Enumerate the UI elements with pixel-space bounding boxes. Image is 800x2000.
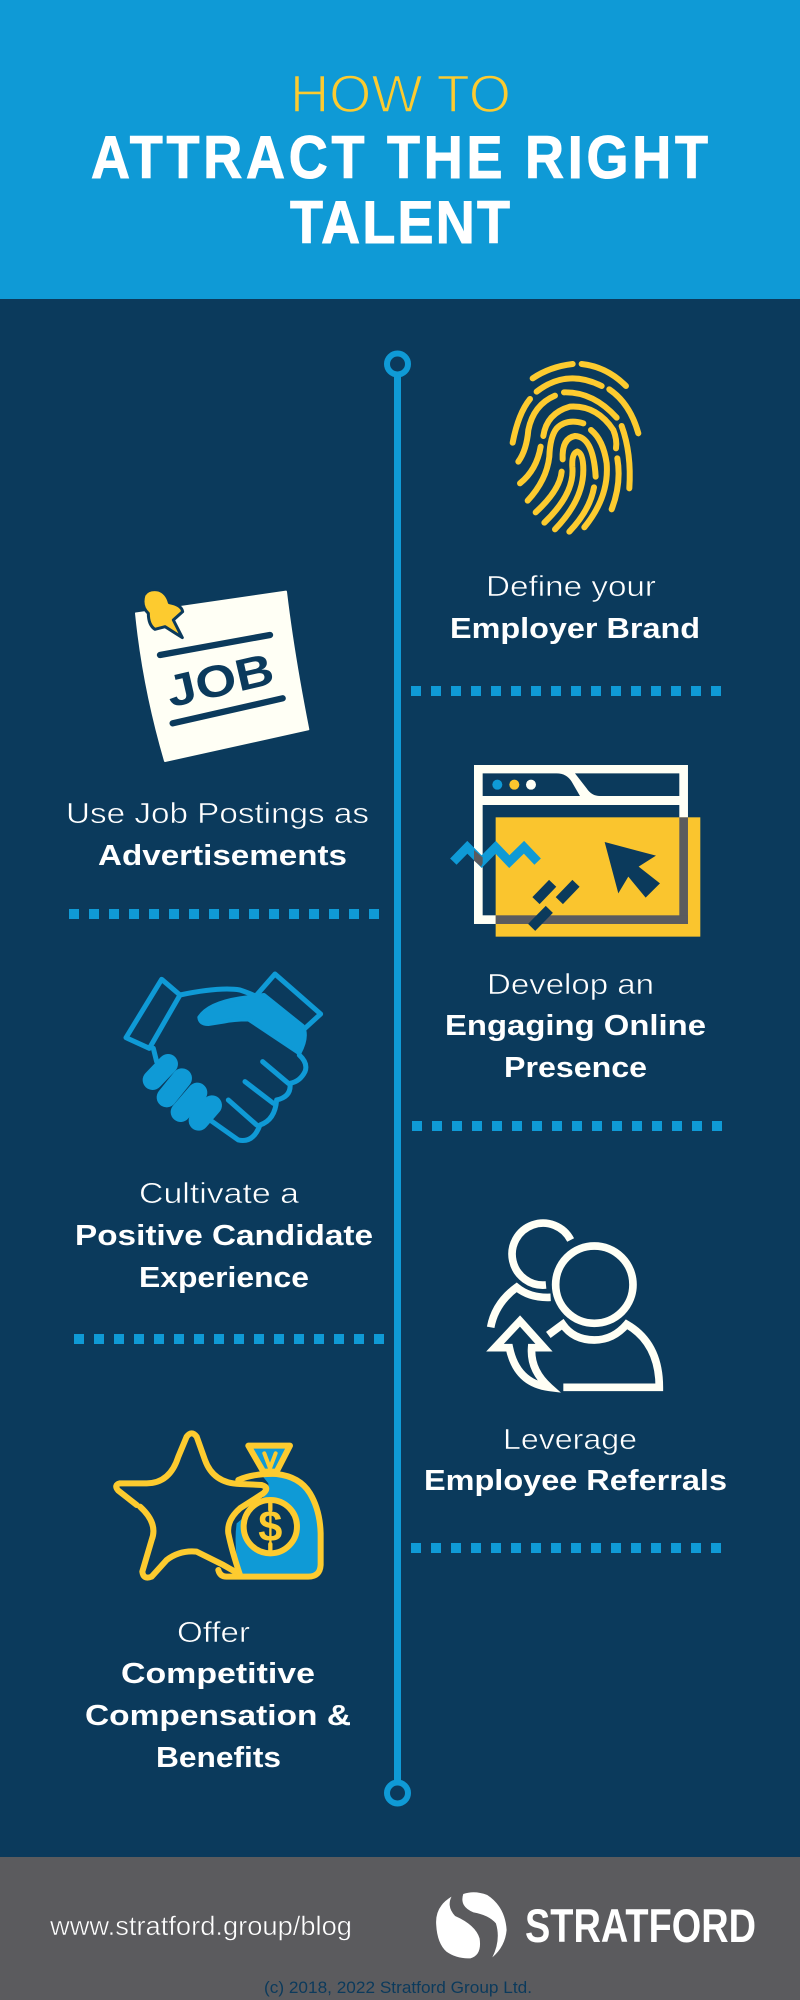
icon: employee referrals	[491, 1223, 659, 1387]
text: define your employer brand	[450, 571, 700, 645]
text: use job postings as advertisements: Use Job Postings as	[66, 798, 369, 830]
text: offer competitive compensation and benefits	[85, 1617, 351, 1774]
text: offer competitive compensation and benefits: Benefits	[156, 1742, 281, 1774]
text: define your employer brand: Employer Brand	[450, 613, 700, 645]
text: cultivate a positive candidate experience: Positive Candidate	[75, 1220, 373, 1252]
panel: footer	[0, 1857, 800, 2000]
text: blog url: www.stratford.group/blog	[49, 1911, 352, 1941]
icon: push pin	[143, 590, 183, 638]
text: define your employer brand: Define your	[486, 571, 656, 603]
title: attract the right talent	[91, 124, 708, 257]
icon: star and money bag	[116, 1433, 321, 1578]
text: offer competitive compensation and benefits: Compensation &	[85, 1700, 351, 1732]
text: develop an engaging online presence: Presence	[504, 1052, 647, 1084]
logo: stratford mark	[436, 1892, 507, 1958]
heading: how to: HOW TO	[290, 65, 511, 124]
title: attract the right talent: ATTRACT THE RIGHT	[91, 124, 708, 192]
icon: handshake	[126, 974, 321, 1140]
text: cultivate a positive candidate experience: Experience	[139, 1262, 309, 1294]
text: use job postings as advertisements	[66, 798, 369, 872]
icon: fingerprint	[513, 364, 638, 532]
text: use job postings as advertisements: Advertisements	[98, 840, 347, 872]
text: leverage employee referrals: Leverage	[503, 1424, 637, 1456]
icon: job posting note	[136, 590, 308, 761]
icon: job posting note: JOB	[162, 645, 278, 717]
text: develop an engaging online presence	[445, 969, 706, 1084]
text: leverage employee referrals: Employee Referrals	[424, 1465, 727, 1497]
text: offer competitive compensation and benefits: Competitive	[121, 1658, 315, 1690]
text: develop an engaging online presence: Engaging Online	[445, 1010, 706, 1042]
title: attract the right talent: TALENT	[290, 189, 510, 257]
panel: header	[0, 0, 800, 299]
text: cultivate a positive candidate experience: Cultivate a	[139, 1178, 300, 1210]
text: copyright: (c) 2018, 2022 Stratford Group Ltd.	[264, 1979, 532, 1997]
text: leverage employee referrals	[424, 1424, 727, 1497]
icon: star and money bag: $	[258, 1504, 282, 1552]
text: cultivate a positive candidate experience	[75, 1178, 373, 1294]
icon: browser window with cursor	[453, 765, 700, 937]
text: offer competitive compensation and benefits: Offer	[177, 1617, 250, 1649]
text: develop an engaging online presence: Develop an	[487, 969, 654, 1001]
timeline: vertical line with end rings	[387, 354, 408, 1804]
